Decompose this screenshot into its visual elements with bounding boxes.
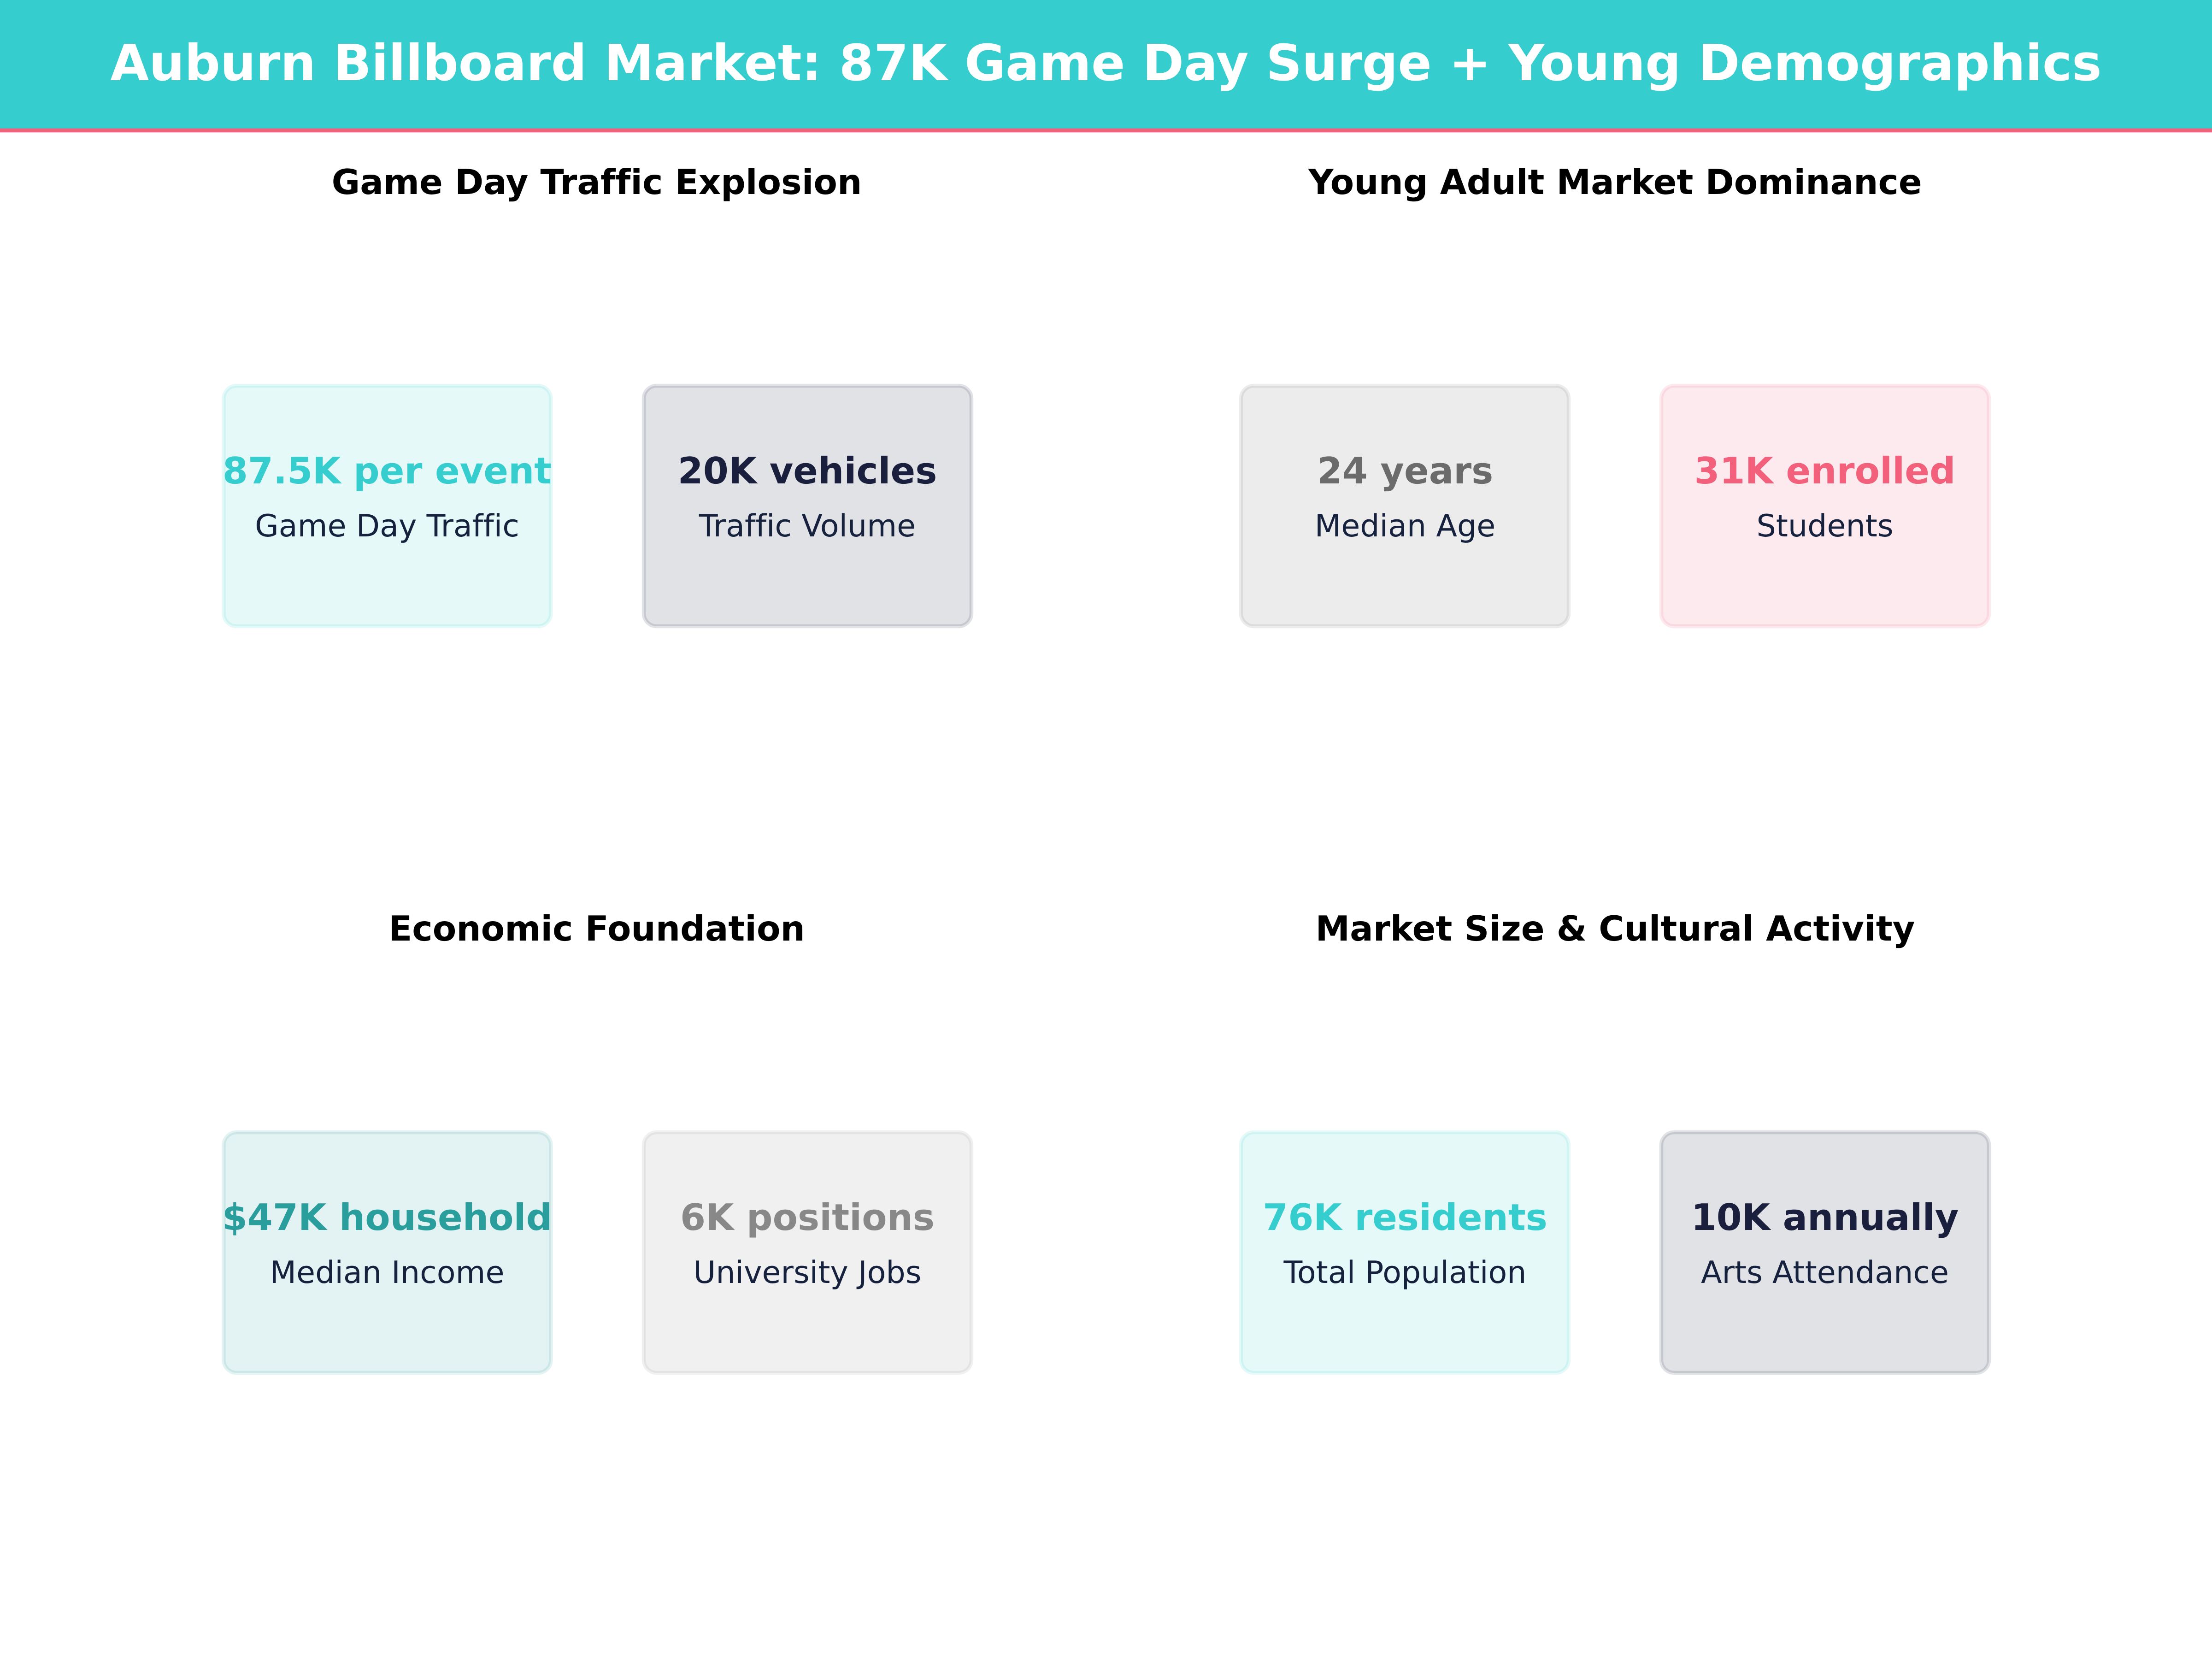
- card: median income: Median Income: [270, 1254, 504, 1290]
- card: median age: 24 years: [1317, 450, 1493, 492]
- title: Auburn Billboard Market: 87K Game Day Surge + Young Demographics: [110, 34, 2102, 92]
- heading: young adult market: Young Adult Market Dominance: [1308, 162, 1922, 202]
- card: total population: 76K residents: [1263, 1196, 1547, 1239]
- panel: economic foundation: [222, 908, 971, 1373]
- card: university jobs: 6K positions: [680, 1196, 935, 1239]
- card: university jobs: [644, 1132, 971, 1373]
- card: arts attendance: 10K annually: [1691, 1196, 1959, 1239]
- card: median income: [222, 1132, 552, 1373]
- heading: market size: Market Size & Cultural Activity: [1315, 908, 1915, 949]
- card: total population: Total Population: [1283, 1254, 1527, 1290]
- heading: economic foundation: Economic Foundation: [388, 908, 805, 949]
- card: total population: [1241, 1132, 1569, 1373]
- card: median age: Median Age: [1315, 508, 1495, 544]
- card: median age: [1241, 386, 1569, 626]
- card: traffic volume: [644, 386, 971, 626]
- heading: game day traffic: Game Day Traffic Explosion: [332, 162, 862, 202]
- panel: market size and cultural activity: [1241, 908, 1989, 1373]
- card: game day traffic: [223, 386, 552, 626]
- header banner: [0, 0, 2212, 132]
- card: university jobs: University Jobs: [694, 1254, 921, 1290]
- card: traffic volume: 20K vehicles: [678, 450, 937, 492]
- card: arts attendance: Arts Attendance: [1701, 1254, 1949, 1290]
- card: students: Students: [1756, 508, 1894, 544]
- card: arts attendance: [1661, 1132, 1989, 1373]
- card: students: 31K enrolled: [1694, 450, 1956, 492]
- card: median income: $47K household: [222, 1196, 552, 1239]
- card: game day traffic: 87.5K per event: [223, 450, 552, 492]
- card: traffic volume: Traffic Volume: [699, 508, 916, 544]
- card: game day traffic: Game Day Traffic: [255, 508, 519, 544]
- panel: young adult market: [1241, 162, 1989, 626]
- panel: game day traffic: [223, 162, 971, 626]
- card: students: [1661, 386, 1989, 626]
